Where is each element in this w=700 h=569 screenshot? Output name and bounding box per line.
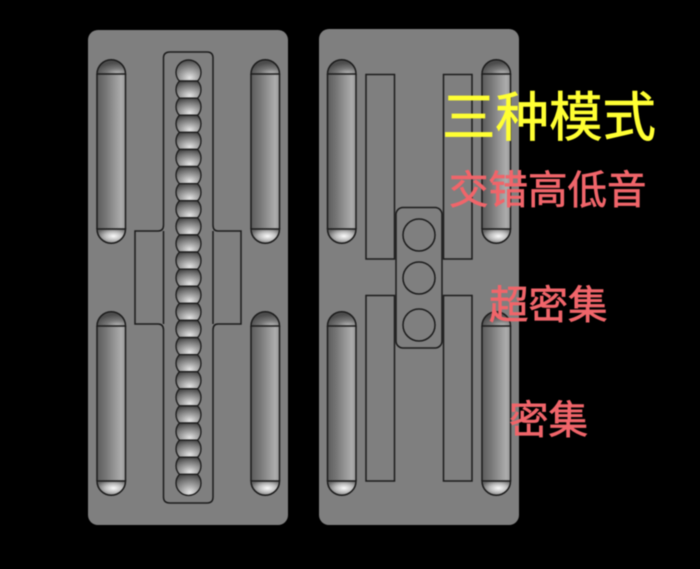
slot: left bottom (97, 312, 126, 495)
slot: right bottom (482, 312, 510, 495)
label: dense: 密集 (509, 399, 588, 443)
slot: left top (97, 60, 126, 243)
panel: left plate (88, 30, 288, 525)
title: 三种模式 (442, 89, 656, 148)
centre block with three circles (396, 208, 442, 348)
slot: left top (328, 60, 356, 243)
panel: right plate (319, 29, 519, 525)
slot: right bottom (251, 312, 280, 495)
ball column (176, 60, 201, 495)
slot: right top (482, 60, 510, 243)
label: ultra dense: 超密集 (489, 284, 608, 328)
slot: left bottom (328, 312, 356, 495)
channel and side rectangles (135, 52, 241, 503)
label: staggered bass and treble: 交错高低音 (449, 169, 646, 213)
rectangles around the centre block (366, 74, 472, 481)
slot: right top (251, 60, 280, 243)
